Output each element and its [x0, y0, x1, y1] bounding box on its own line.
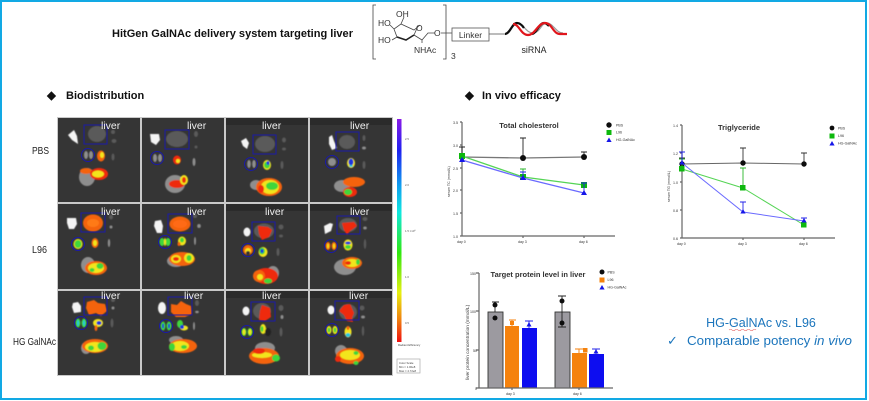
axis labels: 2.0: [453, 189, 458, 193]
axis labels: day 0: [457, 240, 466, 244]
color scale box: [397, 359, 420, 373]
panel: L96 mouse 2: [142, 204, 224, 289]
panel: PBS mouse 3: [226, 118, 308, 202]
color scale box: Color Scale: [399, 361, 414, 365]
bracketed GalNAc sugar: NHAc: [414, 45, 437, 55]
chart title: Total cholesterol: [499, 121, 559, 130]
panel: HG GalNAc mouse 3: liver: [262, 290, 282, 302]
panel: PBS mouse 2: liver: [187, 120, 207, 132]
axis labels: 1.2: [673, 152, 678, 156]
panel: HG GalNAc mouse 2: [142, 290, 224, 375]
legend: [599, 270, 627, 290]
bracketed GalNAc sugar: HO: [378, 18, 391, 28]
panel: HG GalNAc mouse 1: liver: [101, 290, 121, 302]
siRNA helix: siRNA: [522, 45, 547, 55]
panel: L96 mouse 1: [58, 204, 140, 289]
panel: L96 mouse 3: liver: [265, 206, 285, 218]
heading: In vivo efficacy: ◆: [464, 90, 475, 102]
chart title: Triglyceride: [718, 123, 760, 132]
axis labels: 100: [470, 310, 476, 314]
axis labels: 0.6: [673, 237, 678, 241]
panel: L96 mouse 4: liver: [350, 206, 370, 218]
legend: [606, 122, 635, 142]
panel: HG GalNAc mouse 2: liver: [184, 290, 204, 302]
axis labels: 1.0: [673, 181, 678, 185]
siRNA helix: [505, 23, 567, 55]
color scale box: Min = 1.00e8: [399, 365, 416, 369]
axis labels: 1.5: [453, 212, 458, 216]
bracketed GalNAc sugar: OH: [396, 9, 409, 19]
legend: HG-GalNAc: [838, 142, 857, 146]
panel: PBS mouse 1: liver: [101, 120, 121, 132]
row label: HG GalNAc: HG GalNAc: [13, 337, 56, 348]
bars: [488, 312, 604, 388]
legend: L96: [838, 134, 844, 138]
axis labels: 1.0: [453, 235, 458, 239]
legend: PBS: [608, 270, 615, 274]
heading: Biodistribution: ◆: [46, 90, 57, 102]
series: PBS: [679, 148, 807, 167]
axis labels: day 3: [506, 392, 515, 396]
legend: L96: [608, 278, 614, 282]
legend: HG-GalNAc: [608, 286, 627, 290]
error bars and data points: [492, 296, 600, 354]
panel: HG GalNAc mouse 4: liver: [349, 290, 369, 302]
legend: HG-GalNAc: [616, 138, 635, 142]
check mark: ✓: [667, 333, 678, 348]
chart: total cholesterol: [447, 121, 635, 244]
linker box: Linker: [459, 30, 482, 40]
bracketed GalNAc sugar: O: [434, 28, 441, 38]
series: L96: [459, 153, 587, 188]
color scale box: Max = 2.72e8: [399, 369, 416, 373]
axis labels: [667, 124, 808, 246]
bracketed GalNAc sugar: HO: [378, 35, 391, 45]
color scale bar: 1.5 ×10⁸: [405, 229, 416, 233]
series: PBS: [459, 138, 587, 161]
legend: PBS: [616, 124, 624, 128]
panel: L96 mouse 3: [226, 204, 308, 289]
legend: L96: [616, 130, 622, 134]
bracketed GalNAc sugar: O: [416, 23, 423, 33]
panel: PBS mouse 1: [58, 118, 140, 202]
linker box: [452, 28, 505, 41]
axis labels: 1.4: [673, 124, 678, 128]
axis labels: [465, 272, 582, 396]
panel: L96 mouse 1: liver: [101, 206, 121, 218]
axis labels: day 6: [579, 240, 588, 244]
axis labels: day 0: [677, 242, 686, 246]
chemical structure: GalNAc linker siRNA: [373, 5, 567, 61]
panel: PBS mouse 4: [310, 118, 392, 202]
axis labels: 2.5: [453, 167, 458, 171]
heading: In vivo efficacy: In vivo efficacy: [482, 90, 562, 102]
axis labels: day 3: [518, 240, 527, 244]
chart: target protein level in liver: [465, 270, 627, 396]
bracketed GalNAc sugar: 3: [451, 51, 456, 61]
axis labels: serum TG (mmol/L): [667, 171, 671, 202]
legend: [829, 126, 857, 146]
panel: PBS mouse 2: [142, 118, 224, 202]
conclusion callout: Comparable potency in vivo: [687, 333, 852, 348]
axis labels: [447, 121, 588, 244]
axis labels: 0: [475, 387, 477, 391]
panel: L96 mouse 2: liver: [187, 206, 207, 218]
color scale bar: 1.0: [405, 275, 409, 279]
series: L96: [679, 159, 806, 228]
axis labels: 3.5: [453, 121, 458, 125]
radiant efficiency note: Radiant Efficiency: [398, 343, 421, 347]
panel: L96 mouse 4: [310, 204, 392, 289]
axis labels: day 6: [573, 392, 582, 396]
axes: [680, 125, 835, 240]
panel: PBS mouse 3: liver: [262, 120, 282, 132]
axis labels: day 3: [738, 242, 747, 246]
bracketed GalNAc sugar: [373, 5, 456, 61]
row label: PBS: PBS: [32, 146, 49, 157]
panel: PBS mouse 4: liver: [350, 120, 370, 132]
panel: HG GalNAc mouse 1: [58, 290, 140, 375]
axis labels: day 6: [799, 242, 808, 246]
axis labels: liver protein concentration (mmol/L): [465, 304, 471, 380]
series: HG-GalNAc: [679, 152, 807, 222]
series: HG-GalNAc: [459, 157, 587, 195]
conclusion callout: HG-GalNAc vs. L96: [706, 316, 816, 330]
chart title: Target protein level in liver: [491, 270, 586, 279]
axis labels: 150: [470, 272, 476, 276]
panel: HG GalNAc mouse 3: [226, 290, 308, 375]
axis labels: 0.8: [673, 209, 678, 213]
color scale bar: [397, 119, 421, 373]
conclusion callout: [667, 316, 852, 348]
axes: [460, 122, 615, 238]
axis labels: 3.0: [453, 144, 458, 148]
row label: L96: L96: [32, 245, 47, 256]
color scale bar: 2.5: [405, 137, 409, 141]
chart: triglyceride: [667, 123, 857, 246]
legend: PBS: [838, 126, 846, 130]
color scale bar: 2.0: [405, 183, 409, 187]
axis labels: serum TC (mmol/L): [447, 166, 451, 197]
panel: HG GalNAc mouse 4: [310, 290, 392, 375]
axis labels: 50: [473, 349, 477, 353]
imaging panel grid: [57, 117, 393, 376]
color scale bar: 0.5: [405, 321, 409, 325]
heading: Biodistribution: Biodistribution: [66, 90, 144, 102]
axes: [476, 273, 613, 390]
title: HitGen GalNAc delivery system targeting liver: [112, 28, 354, 40]
